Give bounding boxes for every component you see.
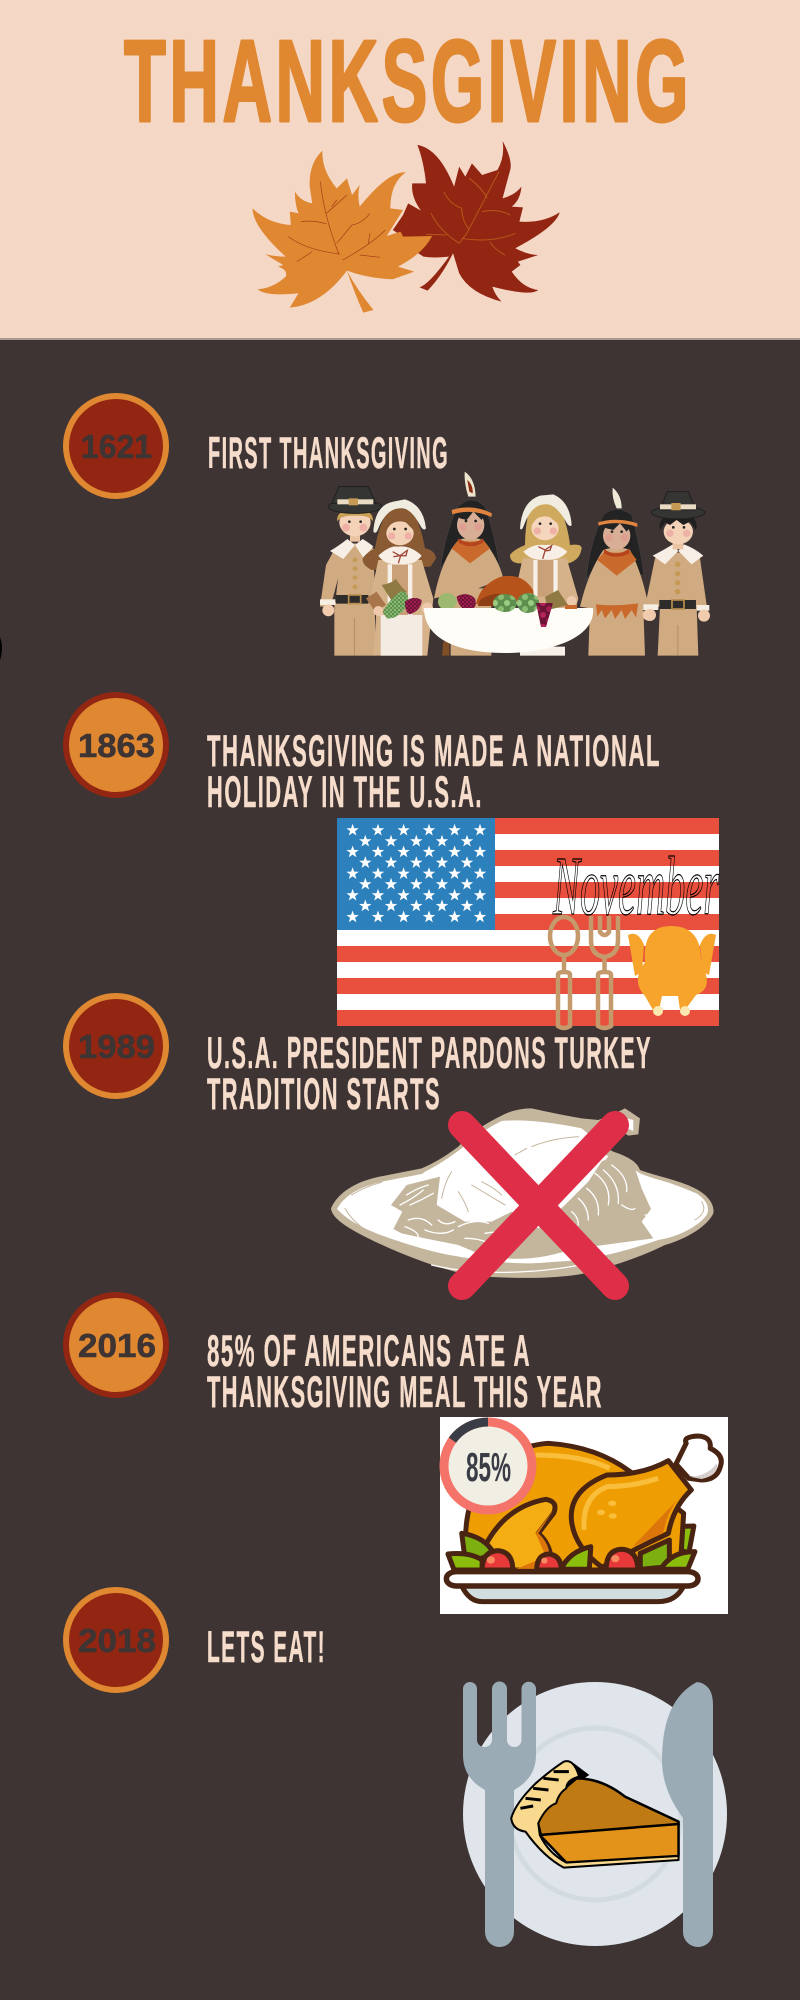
middle leaf [561, 1547, 591, 1569]
platter and turkey silhouette [331, 1108, 714, 1278]
left leaves [462, 1533, 494, 1560]
year badge 1989: 1989 [78, 1028, 155, 1065]
icon: turkey [628, 926, 716, 1016]
decorative edge mark [0, 637, 2, 660]
year badge 1621 [66, 396, 166, 496]
year badge 2018 [66, 1590, 166, 1690]
flag stripes [337, 818, 719, 1026]
figures left [320, 472, 503, 656]
illustration: crossed-out turkey on platter [331, 1108, 714, 1286]
heading: president pardons turkey: TRADITION STARTS [207, 1070, 441, 1119]
berries [482, 1551, 513, 1570]
roast turkey on table [476, 576, 533, 606]
illustration: pilgrims and natives at table [310, 472, 720, 664]
pilgrim man 1 [320, 487, 382, 656]
panel: header [0, 0, 800, 340]
engraved texture [400, 1165, 688, 1272]
pilgrim woman 1 [363, 499, 436, 656]
icon: fork [591, 916, 618, 1028]
chart: 85% donut: 85% [466, 1444, 511, 1490]
heading: national holiday: HOLIDAY IN THE U.S.A. [207, 768, 483, 817]
turkey body [465, 1443, 684, 1570]
feast table [424, 576, 593, 653]
heading: president pardons turkey [207, 1029, 652, 1119]
red cross [462, 1125, 615, 1286]
chart: 85% donut [444, 1422, 532, 1510]
platter well [337, 1158, 708, 1263]
knife [662, 1682, 713, 1947]
table grapes [493, 594, 517, 612]
plate [463, 1682, 727, 1946]
year badge 1621: 1621 [81, 428, 152, 465]
fork [463, 1682, 536, 1947]
year badge 1863: 1863 [78, 727, 155, 764]
table bottom legs [442, 642, 449, 656]
turkey right shading [538, 1153, 653, 1247]
flag canton with stars [337, 818, 495, 930]
text: LETS EAT! [207, 1623, 326, 1672]
heading: national holiday [207, 727, 661, 817]
native figure 1 [434, 472, 503, 656]
pilgrim man 2 [643, 492, 710, 656]
turkey lower-left shading [391, 1177, 578, 1259]
figures right [510, 488, 710, 656]
pilgrim woman 2 [510, 494, 582, 656]
icon: orange leaf [253, 151, 432, 313]
bone [676, 1436, 721, 1480]
illustration: plate with pie, fork and knife [463, 1682, 727, 1947]
platter rim [462, 1586, 684, 1602]
icon: spoon [550, 917, 578, 1028]
pie slice [511, 1761, 679, 1868]
illustration: american flag with november calendar [337, 818, 719, 1028]
ground mask under figures [310, 656, 720, 664]
thigh [571, 1461, 691, 1567]
turkey white breast [408, 1120, 608, 1228]
illustration: roast turkey [440, 1417, 728, 1614]
right leaves [640, 1540, 669, 1569]
icon: autumn leaves [253, 141, 560, 313]
year badge 2016: 2016 [78, 1327, 156, 1364]
far greens [673, 1526, 694, 1553]
native figure 2 [580, 488, 654, 656]
icon: red leaf [393, 141, 560, 302]
text: FIRST THANKSGIVING [208, 429, 449, 478]
year badge 1989 [66, 996, 166, 1096]
year badge 1863 [66, 695, 166, 795]
year badge 2018: 2018 [78, 1622, 156, 1659]
green and purple grapes, leaves [366, 579, 476, 619]
wing [485, 1499, 555, 1570]
heading: 85 percent [207, 1327, 603, 1417]
year badge 2016 [66, 1295, 166, 1395]
